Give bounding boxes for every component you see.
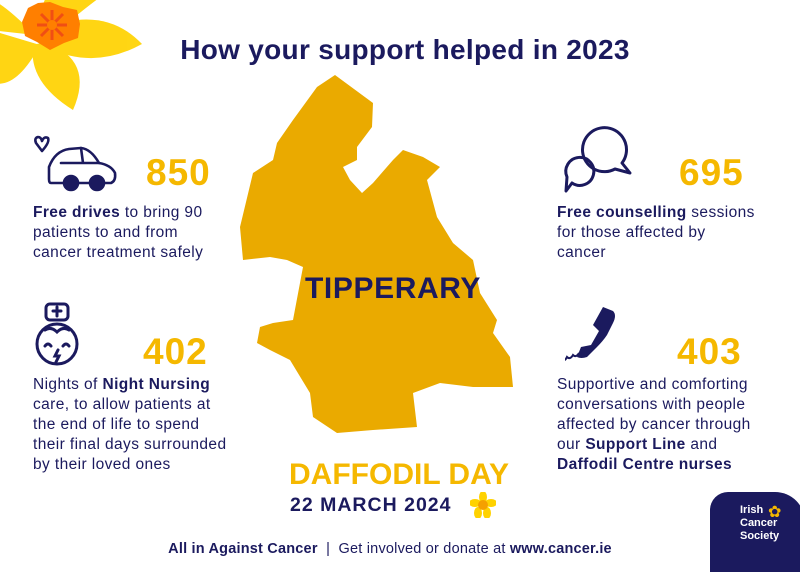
stat: 695 counselling: cancer [557, 244, 606, 261]
stat: 403 support line: conversations with people [557, 396, 745, 413]
stat: 403 support line: Daffodil Centre nurses [557, 456, 732, 473]
logo: Irish Cancer Society [710, 492, 800, 572]
title: How your support helped in 2023 [180, 34, 630, 65]
logo: Irish Cancer Society: Society [740, 530, 779, 542]
stat: 850 free drives: cancer treatment safely [33, 244, 203, 261]
stat: 695 counselling: 695 [679, 152, 744, 193]
stat: 402 night nursing: by their loved ones [33, 456, 171, 473]
event: Daffodil Day [289, 458, 509, 516]
logo: Irish Cancer Society: Irish [740, 504, 763, 516]
event: Daffodil Day: 22 MARCH 2024 [290, 494, 451, 516]
stat: 402 night nursing: the end of life to spend [33, 416, 199, 433]
stat: 403 support line [557, 331, 751, 473]
stat: 695 counselling: for those affected by [557, 224, 706, 241]
icon: nurse [36, 302, 78, 366]
stat: 850 free drives: Free drives to bring 90 [33, 204, 202, 221]
stat: 403 support line: affected by cancer through [557, 416, 751, 433]
stat: 402 night nursing: care, to allow patients at [33, 396, 211, 413]
logo: Irish Cancer Society: Cancer [740, 517, 777, 529]
decorative daffodil top-left [0, 0, 142, 110]
stat: 403 support line: Supportive and comforting [557, 376, 748, 393]
logo: Irish Cancer Society: ✿ [768, 504, 781, 521]
stat: 402 night nursing: their final days surrounded [33, 436, 226, 453]
event: Daffodil Day: DAFFODIL DAY [289, 458, 509, 491]
icon: speech bubbles [564, 126, 632, 193]
icon: telephone handset [565, 307, 615, 361]
stat: 850 free drives [33, 152, 211, 261]
stat: 402 night nursing: Nights of Night Nursing [33, 376, 210, 393]
stat: 695 counselling [557, 152, 755, 261]
stat: 403 support line: 403 [677, 331, 742, 372]
stat: 403 support line: our Support Line and [557, 436, 717, 453]
stat: 850 free drives: patients to and from [33, 224, 178, 241]
stat: 695 counselling: Free counselling sessions [557, 204, 755, 221]
footer: All in Against Cancer | Get involved or donate at www.cancer.ie [168, 541, 612, 557]
icon: small daffodil [470, 492, 496, 518]
stat: 402 night nursing [33, 331, 226, 473]
map label: TIPPERARY [305, 272, 481, 305]
icon: car with heart [34, 136, 116, 192]
stat: 402 night nursing: 402 [143, 331, 208, 372]
stat: 850 free drives: 850 [146, 152, 211, 193]
